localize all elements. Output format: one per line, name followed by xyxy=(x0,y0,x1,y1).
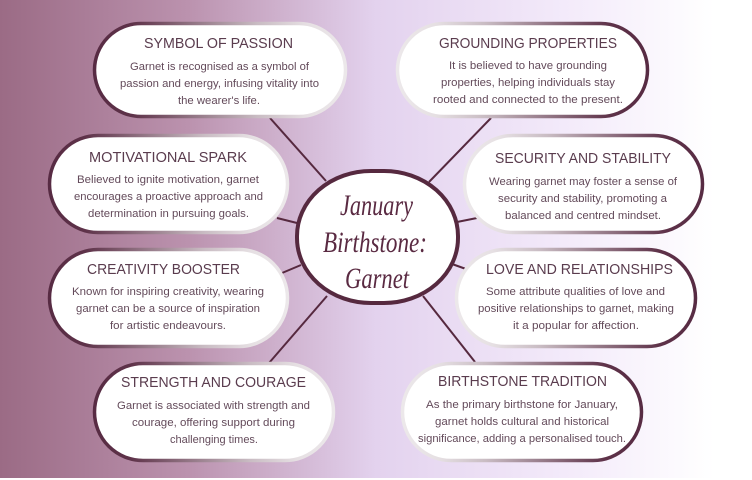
body text xyxy=(72,286,264,332)
panel: strength and courage xyxy=(94,364,334,460)
body text: courage, offering support during xyxy=(132,417,295,429)
panel: central title xyxy=(297,171,458,303)
body text: for artistic endeavours. xyxy=(110,320,226,332)
panel: birthstone tradition xyxy=(402,364,642,460)
body text: garnet holds cultural and historical xyxy=(435,416,609,428)
body text: the wearer's life. xyxy=(178,95,260,107)
pill outline xyxy=(50,136,288,232)
pill outline xyxy=(50,250,288,346)
title: January xyxy=(340,189,414,222)
body text: rooted and connected to the present. xyxy=(433,94,623,106)
panel: security and stability xyxy=(464,136,702,232)
heading: CREATIVITY BOOSTER xyxy=(87,262,240,278)
body text xyxy=(478,286,674,332)
heading: SECURITY AND STABILITY xyxy=(495,151,671,167)
body text: Garnet is recognised as a symbol of xyxy=(130,61,310,73)
body text: positive relationships to garnet, making xyxy=(478,303,674,315)
panel: motivational spark xyxy=(50,136,288,232)
body text xyxy=(418,399,626,445)
body text: passion and energy, infusing vitality into xyxy=(120,78,319,90)
heading: SYMBOL OF PASSION xyxy=(144,36,293,52)
pill outline xyxy=(464,136,702,232)
body text xyxy=(74,174,263,220)
title xyxy=(323,189,427,295)
pill outline xyxy=(398,24,648,116)
body text: security and stability, promoting a xyxy=(498,193,668,205)
pill outline xyxy=(456,250,696,346)
body text: properties, helping individuals stay xyxy=(441,77,616,89)
body text: It is believed to have grounding xyxy=(449,60,607,72)
body text: significance, adding a personalised touch. xyxy=(418,433,626,445)
heading: GROUNDING PROPERTIES xyxy=(439,36,617,52)
heading: MOTIVATIONAL SPARK xyxy=(89,150,247,166)
body text: Known for inspiring creativity, wearing xyxy=(72,286,264,298)
body text xyxy=(120,61,319,107)
pill outline xyxy=(94,364,334,460)
body text: As the primary birthstone for January, xyxy=(426,399,618,411)
body text xyxy=(489,176,678,222)
body text: encourages a proactive approach and xyxy=(74,191,263,203)
body text: determination in pursuing goals. xyxy=(88,208,249,220)
body text xyxy=(433,60,623,106)
body text: balanced and centred mindset. xyxy=(505,210,661,222)
pill outline xyxy=(402,364,642,460)
connector lines xyxy=(269,118,491,363)
heading: STRENGTH AND COURAGE xyxy=(121,375,306,391)
pill outline xyxy=(94,24,346,116)
central rounded shape xyxy=(297,171,458,303)
title: Birthstone: xyxy=(323,226,427,259)
body text: it a popular for affection. xyxy=(513,320,639,332)
body text: Some attribute qualities of love and xyxy=(486,286,665,298)
panel: creativity booster xyxy=(50,250,288,346)
heading: LOVE AND RELATIONSHIPS xyxy=(486,262,673,278)
panel: symbol of passion xyxy=(94,24,346,116)
body text: Wearing garnet may foster a sense of xyxy=(489,176,678,188)
body text xyxy=(117,400,310,446)
body text: challenging times. xyxy=(170,434,258,446)
body text: garnet can be a source of inspiration xyxy=(76,303,260,315)
panel: grounding properties xyxy=(398,24,648,116)
title: Garnet xyxy=(345,262,409,295)
panel: love and relationships xyxy=(456,250,696,346)
body text: Believed to ignite motivation, garnet xyxy=(77,174,259,186)
body text: Garnet is associated with strength and xyxy=(117,400,310,412)
heading: BIRTHSTONE TRADITION xyxy=(438,374,607,390)
